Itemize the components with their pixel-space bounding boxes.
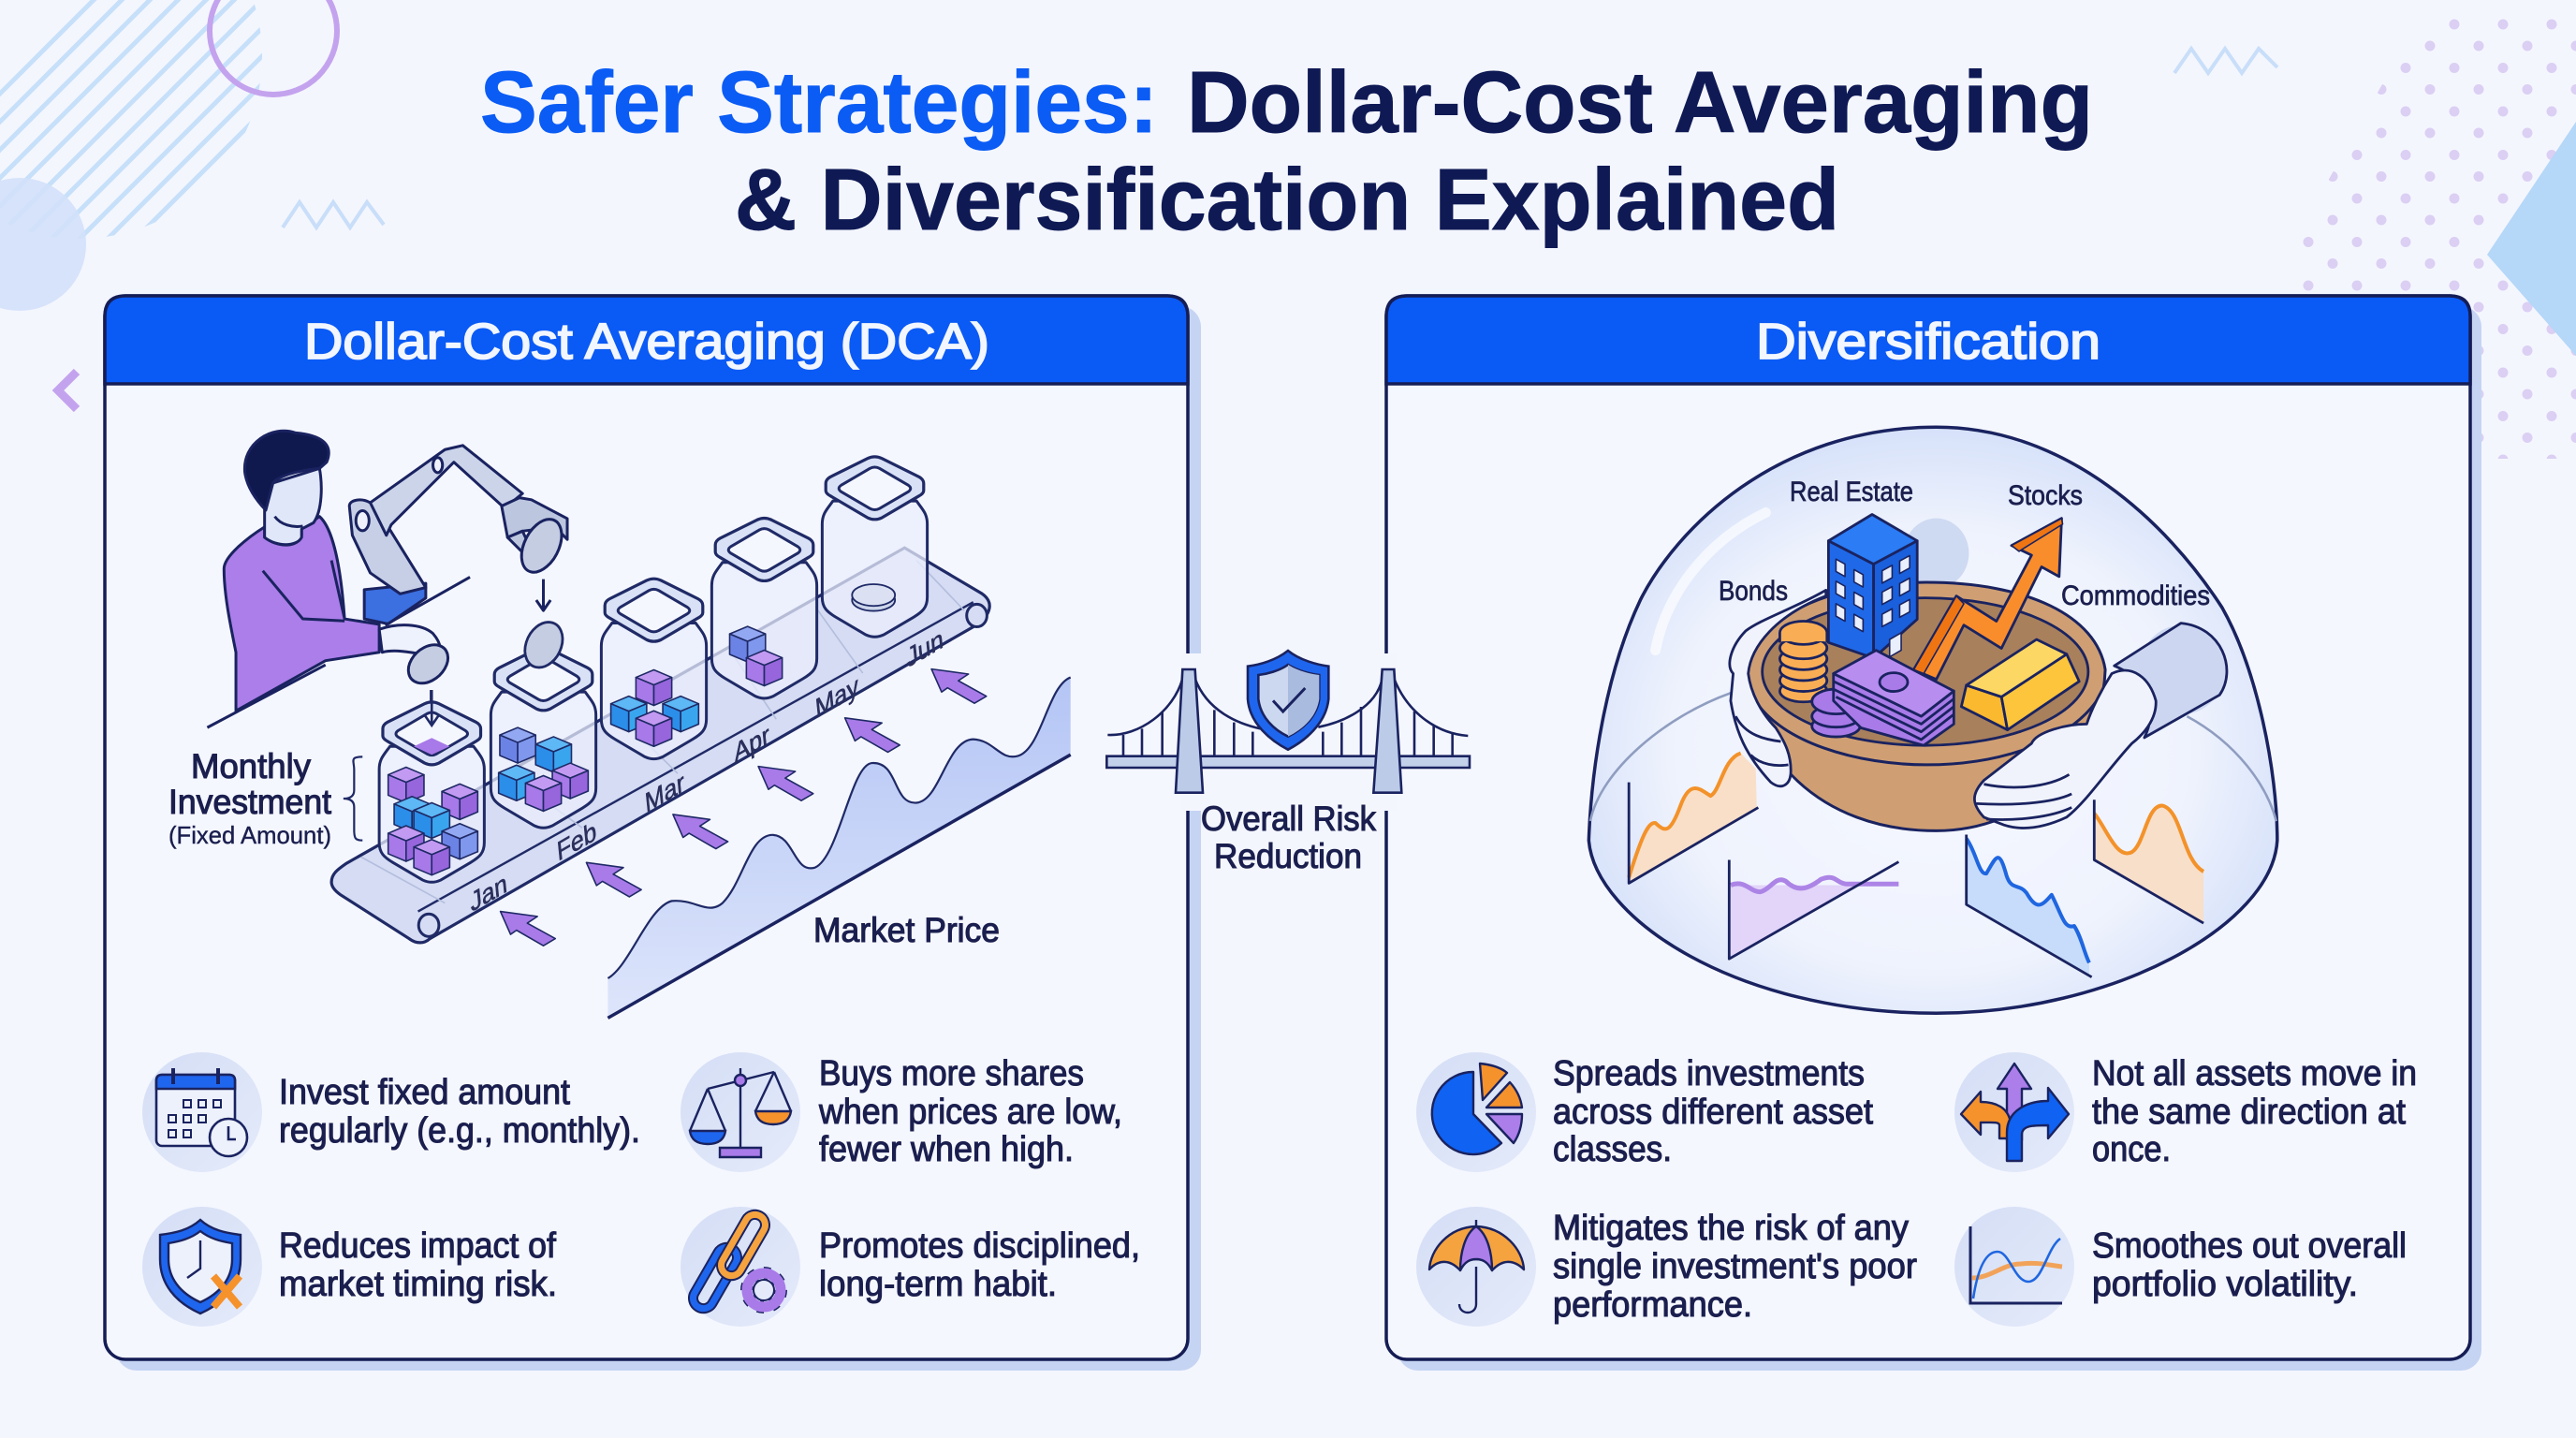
bowl (1747, 582, 2105, 830)
label: monthly investment: Investment (168, 783, 332, 821)
hands (1730, 590, 2227, 829)
text (2092, 1226, 2407, 1304)
icon: chain and gear (689, 1211, 781, 1313)
mini chart: purple flat (1729, 859, 1898, 959)
label: monthly investment: Monthly (191, 747, 311, 785)
diversification point: smoothes volatility (1954, 1207, 2407, 1327)
heading: diversification: Diversification (1756, 314, 2100, 370)
text: once. (2092, 1130, 2171, 1169)
icon: smooth line chart (1970, 1226, 2062, 1303)
DCA point: disciplined habit (681, 1207, 1140, 1327)
decoration: dot field (2303, 19, 2576, 459)
diversification point: not all assets move (1954, 1052, 2417, 1172)
bridge with shield (1106, 651, 1470, 793)
icon: diverging arrows (1961, 1064, 2069, 1161)
text (1553, 1209, 1917, 1325)
market price chart (607, 678, 1071, 1018)
decoration: purple ring (210, 0, 337, 95)
text: Promotes disciplined, (819, 1226, 1140, 1266)
text: single investment's poor (1553, 1247, 1917, 1286)
icon: shield with clock and x (160, 1220, 241, 1313)
asset labels: Commodities (2061, 580, 2210, 611)
label: overall risk reduction (1201, 800, 1376, 875)
month labels: Jan (469, 868, 508, 917)
text: regularly (e.g., monthly). (279, 1111, 640, 1151)
jar: Jan (379, 690, 484, 882)
label: market price: Market Price (813, 911, 1000, 949)
brace (344, 756, 362, 841)
month labels (469, 624, 944, 917)
person and robot arm (207, 431, 569, 727)
illustration: diversification dome (1588, 427, 2277, 1013)
text (1553, 1054, 1873, 1169)
text: Spreads investments (1553, 1054, 1865, 1093)
icon: pie chart (1432, 1064, 1522, 1154)
DCA point: buys more shares (681, 1052, 1122, 1172)
panel: dollar-cost averaging (105, 296, 1201, 1371)
DCA point: reduces timing risk (142, 1207, 557, 1327)
conveyor belt (331, 548, 989, 943)
jar: Apr (711, 518, 817, 698)
text (818, 1054, 1122, 1169)
asset labels: Bonds (1719, 576, 1788, 607)
icon: robot arm (349, 446, 569, 624)
decoration: striped circle (0, 0, 262, 237)
panel: diversification (1386, 296, 2481, 1371)
cash stack (1834, 651, 1954, 745)
icon: person (224, 431, 456, 711)
text: Mitigates the risk of any (1553, 1209, 1909, 1248)
coins: purple stack (1812, 689, 1860, 737)
text: market timing risk. (279, 1265, 557, 1304)
text: Reduces impact of (279, 1226, 556, 1266)
text (279, 1226, 557, 1304)
text: when prices are low, (818, 1093, 1122, 1132)
asset labels: Real Estate (1790, 477, 1913, 507)
jar: Jun (822, 457, 928, 637)
jar: Feb (490, 620, 596, 828)
asset labels: Stocks (2008, 480, 2083, 511)
month labels: Apr (733, 719, 770, 769)
text: long-term habit. (819, 1265, 1057, 1304)
building: real estate (1828, 515, 1917, 658)
DCA point: invest fixed amount (142, 1052, 640, 1172)
text: fewer when high. (819, 1130, 1074, 1169)
mini chart: orange rising (1629, 753, 1758, 883)
illustration: DCA conveyor (168, 431, 1071, 1018)
icon: balance scale (690, 1068, 791, 1157)
title: & Diversification Explained (735, 151, 1839, 248)
heading: DCA: Dollar-Cost Averaging (DCA) (304, 314, 989, 370)
text: classes. (1553, 1130, 1672, 1169)
decoration: right zigzag (2174, 49, 2277, 73)
bridge gap mask (1181, 653, 1397, 811)
decoration: blue triangle (2487, 122, 2576, 356)
text: portfolio volatility. (2092, 1265, 2358, 1304)
label: overall risk reduction: Overall Risk (1201, 800, 1376, 838)
diversification point: spreads investments (1416, 1052, 1873, 1172)
text: Buys more shares (819, 1054, 1084, 1093)
glass dome (1588, 427, 2277, 1013)
month labels: May (814, 670, 859, 724)
text: Not all assets move in (2092, 1054, 2417, 1093)
icon: shield (1248, 651, 1328, 750)
jar: Mar (601, 579, 707, 759)
diversification point: mitigates risk (1416, 1207, 1917, 1327)
text: the same direction at (2092, 1093, 2406, 1132)
label: monthly investment (168, 747, 332, 849)
icon: calendar (156, 1068, 247, 1156)
label: monthly investment: (Fixed Amount) (168, 821, 331, 849)
gold bar (1961, 639, 2079, 730)
text: Smoothes out overall (2092, 1226, 2407, 1266)
decoration: pale blue circle (0, 178, 86, 311)
text: performance. (1553, 1285, 1752, 1325)
decoration: chevron (58, 372, 77, 409)
title: Dollar-Cost Averaging (1187, 53, 2093, 151)
arrows: purple price arrows (501, 669, 987, 946)
text: across different asset (1553, 1093, 1873, 1132)
title: Safer Strategies: (480, 53, 1158, 151)
text (819, 1226, 1140, 1304)
icon: umbrella (1429, 1220, 1524, 1313)
month labels: Feb (556, 815, 597, 867)
month labels: Mar (644, 767, 685, 818)
mini chart: blue falling (1967, 835, 2092, 977)
asset labels (1719, 477, 2210, 611)
text (279, 1073, 640, 1151)
mini chart: orange wave (2094, 800, 2203, 923)
jars and coins (344, 457, 928, 882)
arrow: stocks (1913, 519, 2063, 680)
month labels: Jun (905, 624, 944, 673)
decoration: left zigzag (283, 202, 384, 227)
label: overall risk reduction: Reduction (1214, 837, 1362, 875)
text (2092, 1054, 2417, 1169)
text: Invest fixed amount (279, 1073, 570, 1112)
coins: bonds (1779, 622, 1827, 702)
title (480, 53, 2093, 248)
